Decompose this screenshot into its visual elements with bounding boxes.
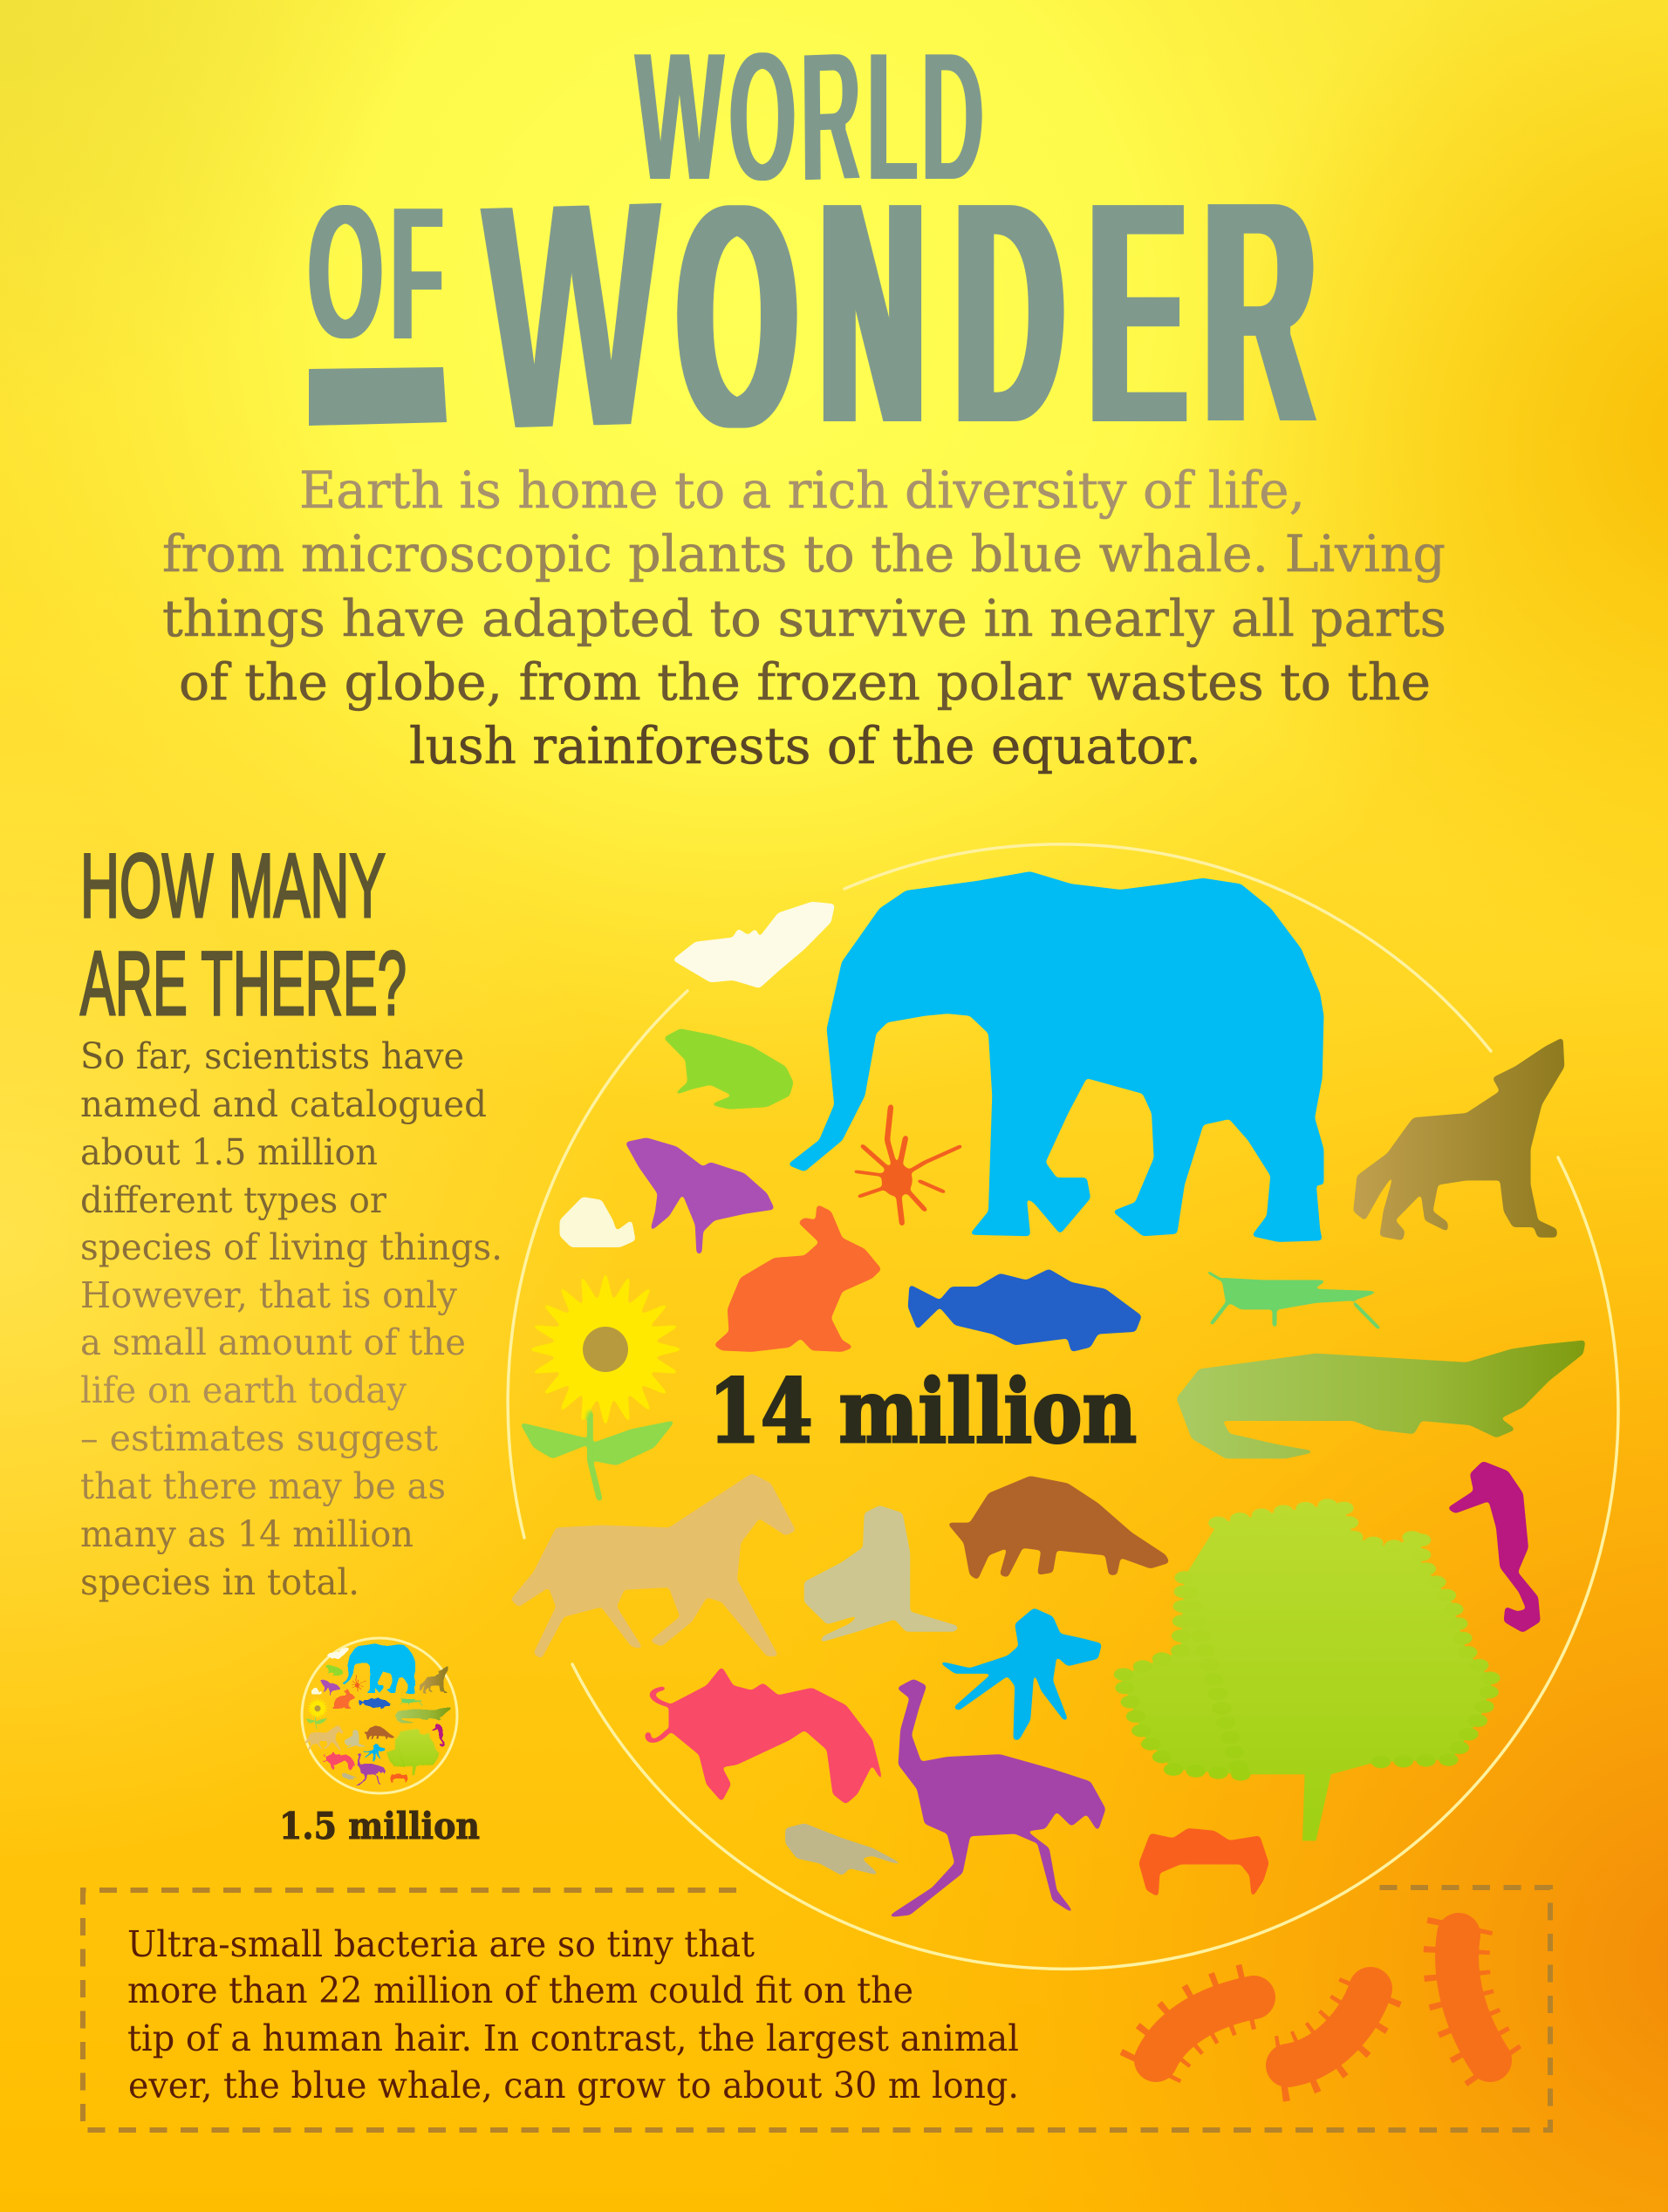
icon: seahorse bbox=[1447, 1461, 1540, 1632]
thumbnail: 1.5 million circle bbox=[279, 1638, 480, 1847]
icon: fox bbox=[947, 1476, 1169, 1580]
icon: fish bbox=[908, 1269, 1141, 1351]
word: OF: O bbox=[308, 164, 383, 380]
left body text: species in total. bbox=[80, 1561, 359, 1603]
letters ONDER: E bbox=[1090, 131, 1186, 494]
left body text: However, that is only bbox=[80, 1274, 458, 1316]
icon: crab bbox=[1139, 1828, 1268, 1897]
upper silhouettes bbox=[560, 871, 1585, 1458]
left body text: – estimates suggest bbox=[80, 1417, 439, 1459]
icon: tree bbox=[1120, 1503, 1493, 1840]
icon: red beast bbox=[648, 1667, 884, 1804]
callout text: more than 22 million of them could fit on the bbox=[127, 1970, 913, 2011]
dashed frame bbox=[83, 1888, 1550, 2130]
icon: bacteria bbox=[1150, 1924, 1497, 2071]
word: OF bbox=[308, 164, 443, 382]
lower silhouettes bbox=[511, 1461, 1540, 1917]
word: WORLD: R bbox=[800, 11, 862, 223]
icon: bat bbox=[673, 902, 835, 988]
icon: ostrich bbox=[887, 1679, 1105, 1917]
miniature species silhouettes bbox=[304, 1643, 451, 1785]
left body text: life on earth today bbox=[80, 1369, 407, 1411]
icon: elephant bbox=[788, 871, 1323, 1241]
intro paragraph: of the globe, from the frozen polar wastes to the bbox=[179, 652, 1431, 712]
title bbox=[308, 11, 1315, 500]
word: WORLD: W bbox=[635, 11, 724, 222]
icon: sunflower stem and leaves bbox=[520, 1411, 675, 1500]
letters ONDER bbox=[678, 130, 1315, 497]
intro paragraph: things have adapted to survive in nearly all parts bbox=[162, 589, 1446, 648]
letter W: W bbox=[482, 133, 665, 500]
icon: rabbit bbox=[714, 1205, 881, 1351]
word: WORLD: O bbox=[728, 11, 796, 222]
silhouettes of species bbox=[511, 871, 1585, 1917]
left body text: named and catalogued bbox=[80, 1083, 487, 1125]
circle outline bbox=[508, 844, 1618, 1969]
left body text: different types or bbox=[80, 1179, 386, 1221]
intro paragraph: from microscopic plants to the blue whale. Living bbox=[162, 524, 1446, 584]
icon: frog bbox=[664, 1029, 793, 1109]
letters ONDER: O bbox=[678, 134, 796, 497]
heading: how many are there: HOW MANY bbox=[80, 836, 386, 937]
label: 1.5 million: 1.5 million bbox=[279, 1805, 480, 1847]
icon: crocodile bbox=[1177, 1341, 1585, 1458]
callout: bacteria box bbox=[83, 1888, 1550, 2130]
heading: how many are there: ARE THERE? bbox=[80, 933, 407, 1034]
word: WONDER bbox=[482, 130, 1315, 500]
icon: spider bbox=[853, 1104, 962, 1225]
small circle outline bbox=[302, 1638, 457, 1793]
icon: seal bbox=[804, 1505, 959, 1642]
callout text: Ultra-small bacteria are so tiny that bbox=[127, 1923, 755, 1965]
smoothed silhouettes bbox=[511, 871, 1585, 1917]
icon: horse bbox=[511, 1474, 796, 1658]
callout text: tip of a human hair. In contrast, the largest animal bbox=[127, 2017, 1019, 2059]
left body text bbox=[80, 1035, 502, 1603]
word: WORLD: D bbox=[921, 11, 984, 222]
left body text: a small amount of the bbox=[80, 1321, 466, 1363]
heading: how many are there bbox=[80, 836, 407, 1034]
icon: octopus bbox=[938, 1608, 1102, 1740]
callout text bbox=[127, 1923, 1019, 2106]
icon: sunflower disc bbox=[583, 1327, 628, 1372]
species circle bbox=[508, 844, 1618, 1969]
left body text: many as 14 million bbox=[80, 1513, 414, 1555]
word: WORLD: L bbox=[867, 12, 918, 222]
intro paragraph: lush rainforests of the equator. bbox=[409, 716, 1201, 775]
label: 14 million: 14 million bbox=[708, 1360, 1137, 1463]
icon: butterfly bbox=[626, 1138, 775, 1253]
intro paragraph: Earth is home to a rich diversity of life, bbox=[299, 461, 1305, 520]
left body text: about 1.5 million bbox=[80, 1131, 378, 1173]
callout text: ever, the blue whale, can grow to about 30 m long. bbox=[128, 2065, 1019, 2106]
left body text: species of living things. bbox=[80, 1226, 502, 1268]
icon: snail bbox=[560, 1197, 635, 1247]
icon: grasshopper bbox=[1207, 1272, 1380, 1329]
icon: beetle bbox=[786, 1824, 910, 1875]
letters ONDER: D bbox=[955, 133, 1063, 495]
word: WORLD bbox=[635, 11, 984, 223]
icon: wolf bbox=[1354, 1038, 1564, 1240]
left body text: So far, scientists have bbox=[80, 1035, 464, 1077]
intro paragraph bbox=[162, 461, 1446, 775]
letters ONDER: R bbox=[1205, 130, 1315, 493]
underline bar under OF bbox=[309, 367, 447, 426]
left body text: that there may be as bbox=[80, 1465, 446, 1507]
word: OF: F bbox=[391, 167, 443, 382]
letters ONDER: N bbox=[821, 131, 924, 494]
icon: sunflower petals bbox=[527, 1271, 684, 1428]
